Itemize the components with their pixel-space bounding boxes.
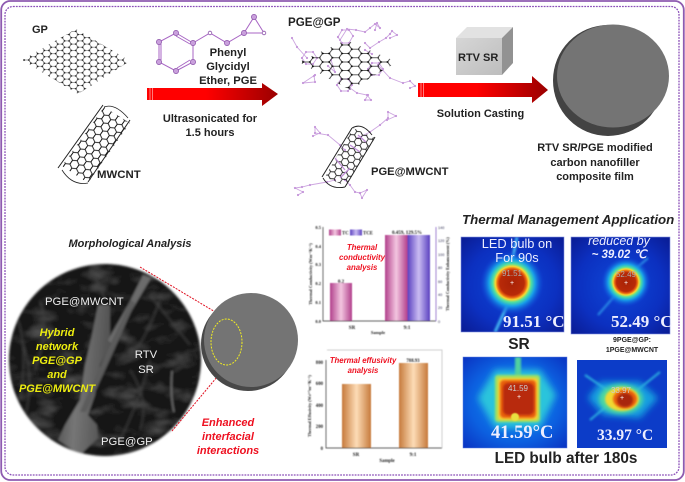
arrow: solution casting bbox=[418, 76, 548, 103]
thermal image: 9:1 at 180s: 33.97 bbox=[611, 386, 632, 395]
chart: thermal effusivity: Thermal Effusivity (Ws¹ᐟ²m⁻²K⁻¹) bbox=[307, 375, 312, 437]
9:1 filler label: 1PGE@MWCNT bbox=[606, 347, 659, 354]
icon: RTV SR cube bbox=[456, 27, 513, 75]
9:1 filler label bbox=[606, 337, 659, 354]
SEM micrograph bbox=[5, 260, 205, 460]
chart: thermal effusivity: 400 bbox=[316, 404, 324, 409]
icon: PGE functionalized graphene bbox=[292, 23, 415, 100]
PGE name: Phenyl bbox=[210, 47, 246, 59]
thermal image: 9:1 at 90s: ~ 39.02 ℃ bbox=[592, 249, 648, 261]
chart: thermal conductivity: 40 bbox=[438, 293, 442, 297]
zoom connector lines bbox=[140, 267, 227, 431]
composite film label: composite film bbox=[556, 171, 634, 183]
enhanced interfacial label: interactions bbox=[197, 445, 259, 457]
PGE name: Ether, PGE bbox=[199, 75, 257, 87]
9:1 filler label: 9PGE@GP: bbox=[613, 337, 651, 344]
chart: thermal effusivity: 800 bbox=[316, 361, 324, 366]
thermal image: 9:1 at 180s: + bbox=[620, 395, 624, 402]
enhanced interfacial label: interfacial bbox=[202, 431, 255, 443]
icon: PGE functionalized MWCNT bbox=[295, 112, 396, 198]
chart: thermal conductivity: 0.0 bbox=[315, 319, 322, 324]
chart: thermal conductivity: Thermal Conductivity Enhancement (%) bbox=[445, 237, 450, 311]
chart annotation bbox=[339, 243, 386, 272]
thermal image: SR at 90s: + bbox=[510, 280, 514, 287]
chart: thermal effusivity: 0 bbox=[321, 447, 324, 452]
enhanced interfacial label: Enhanced bbox=[202, 417, 255, 429]
thermal image: 9:1 at 90s: 52.49 °C bbox=[611, 312, 673, 331]
chart: thermal conductivity: 0.3 bbox=[315, 262, 322, 267]
arrow: ultrasonication bbox=[147, 83, 278, 106]
thermal image: SR at 180s: 41.59°C bbox=[491, 423, 553, 443]
GP label: GP bbox=[32, 24, 48, 36]
chart: thermal conductivity: 0.4 bbox=[315, 244, 322, 249]
chart: thermal conductivity: 20 bbox=[438, 306, 442, 310]
chart: thermal effusivity: SR bbox=[353, 453, 360, 458]
legend: TC bbox=[342, 232, 349, 236]
legend bbox=[329, 230, 373, 236]
chart: thermal effusivity: 9:1 bbox=[410, 453, 417, 458]
thermal image: SR at 90s: For 90s bbox=[495, 250, 539, 265]
chart: thermal conductivity: 100 bbox=[438, 253, 444, 257]
chart: thermal conductivity: Thermal Conductivity (Wm⁻¹K⁻¹) bbox=[308, 243, 313, 305]
bars bbox=[330, 235, 430, 321]
chart: thermal conductivity: 0.2 bbox=[315, 281, 322, 286]
chart: thermal conductivity: 80 bbox=[438, 266, 442, 270]
thermal image: 9:1 at 90s bbox=[571, 234, 673, 334]
chart: thermal conductivity: Sample bbox=[371, 330, 385, 335]
chart: thermal effusivity: 200 bbox=[316, 425, 324, 430]
SEM micrograph: Hybrid bbox=[40, 327, 75, 339]
thermal image: SR at 90s: 91.51 bbox=[502, 269, 523, 278]
chart: thermal conductivity: SR bbox=[349, 326, 356, 331]
enhanced interfacial label bbox=[197, 417, 259, 457]
chart: thermal conductivity: 0.2 bbox=[338, 280, 345, 285]
heading: morphological analysis: Morphological Analysis bbox=[68, 238, 192, 250]
chart: thermal conductivity: 120 bbox=[438, 239, 444, 243]
thermal image: 9:1 at 90s: reduced by bbox=[588, 234, 651, 248]
thermal image: 9:1 at 180s: 33.97 °C bbox=[597, 427, 653, 444]
ultrasonication label: Ultrasonicated for bbox=[163, 113, 258, 125]
LED bulb after 180s label: LED bulb after 180s bbox=[495, 450, 637, 467]
PGE name: Glycidyl bbox=[206, 61, 250, 73]
MWCNT label: MWCNT bbox=[97, 169, 141, 181]
chart: thermal effusivity bbox=[307, 350, 442, 464]
PGE@GP label: PGE@GP bbox=[288, 16, 341, 29]
chart: thermal conductivity: 0.459, 129.5% bbox=[392, 231, 422, 236]
icon: MWCNT nanotube bbox=[58, 105, 130, 183]
icon: PGE molecule bbox=[156, 14, 266, 74]
chart annotation: Thermal bbox=[347, 243, 378, 252]
SEM micrograph: PGE@GP bbox=[101, 436, 153, 448]
chart annotation bbox=[330, 356, 397, 375]
SR label: SR bbox=[508, 336, 530, 353]
composite film label: RTV SR/PGE modified bbox=[537, 142, 653, 154]
solution casting label: Solution Casting bbox=[437, 108, 524, 120]
chart annotation: analysis bbox=[348, 366, 379, 375]
chart annotation: Thermal effusivity bbox=[330, 356, 397, 365]
thermal image: SR at 90s: 91.51 °C bbox=[503, 312, 565, 331]
chart: thermal effusivity: Sample bbox=[379, 459, 395, 464]
chart: thermal effusivity: 788.93 bbox=[406, 359, 420, 364]
thermal image: SR at 180s: 41.59 bbox=[508, 384, 529, 393]
SEM micrograph: and bbox=[47, 369, 67, 381]
chart: thermal conductivity: 9:1 bbox=[404, 326, 411, 331]
composite film label: carbon nanofiller bbox=[550, 157, 640, 169]
SEM micrograph: PGE@MWCNT bbox=[19, 383, 96, 395]
chart: thermal conductivity: 140 bbox=[438, 226, 444, 230]
thermal image: SR at 180s bbox=[463, 357, 567, 448]
chart: thermal conductivity bbox=[308, 225, 450, 335]
chart: thermal effusivity: 600 bbox=[316, 382, 324, 387]
icon: graphene sheet bbox=[23, 29, 128, 94]
chart annotation: conductivity bbox=[339, 253, 386, 262]
SEM micrograph: PGE@GP bbox=[32, 355, 83, 367]
PGE name bbox=[199, 47, 257, 87]
heading: thermal management application: Thermal Management Application bbox=[462, 212, 674, 227]
SEM micrograph: network bbox=[36, 341, 79, 353]
chart: thermal conductivity: 0 bbox=[438, 320, 440, 324]
thermal image: SR at 90s: LED bulb on bbox=[482, 236, 552, 251]
icon: composite film disc bbox=[553, 24, 669, 136]
icon: small film disc with highlighted area bbox=[201, 293, 298, 391]
thermal image: 9:1 at 90s: 52.49 bbox=[616, 270, 637, 279]
composite film label bbox=[537, 142, 653, 183]
chart: thermal conductivity: 0.1 bbox=[315, 300, 322, 305]
chart: thermal conductivity: 0.5 bbox=[315, 225, 322, 230]
chart: thermal conductivity: 60 bbox=[438, 280, 442, 284]
legend: TCE bbox=[363, 232, 373, 236]
thermal image: 9:1 at 180s bbox=[577, 360, 667, 448]
SEM micrograph: RTV bbox=[135, 349, 158, 361]
thermal image: SR at 180s: + bbox=[517, 394, 521, 401]
SEM micrograph: PGE@MWCNT bbox=[45, 296, 124, 308]
ultrasonication label: 1.5 hours bbox=[186, 127, 234, 139]
chart annotation: analysis bbox=[347, 263, 378, 272]
SEM micrograph: SR bbox=[138, 364, 154, 376]
thermal image: SR at 90s bbox=[461, 236, 565, 332]
thermal image: 9:1 at 90s: + bbox=[624, 280, 628, 287]
ultrasonication label bbox=[163, 113, 258, 139]
bars bbox=[342, 363, 428, 448]
icon: RTV SR cube: RTV SR bbox=[458, 52, 498, 64]
PGE@MWCNT label: PGE@MWCNT bbox=[371, 166, 449, 178]
